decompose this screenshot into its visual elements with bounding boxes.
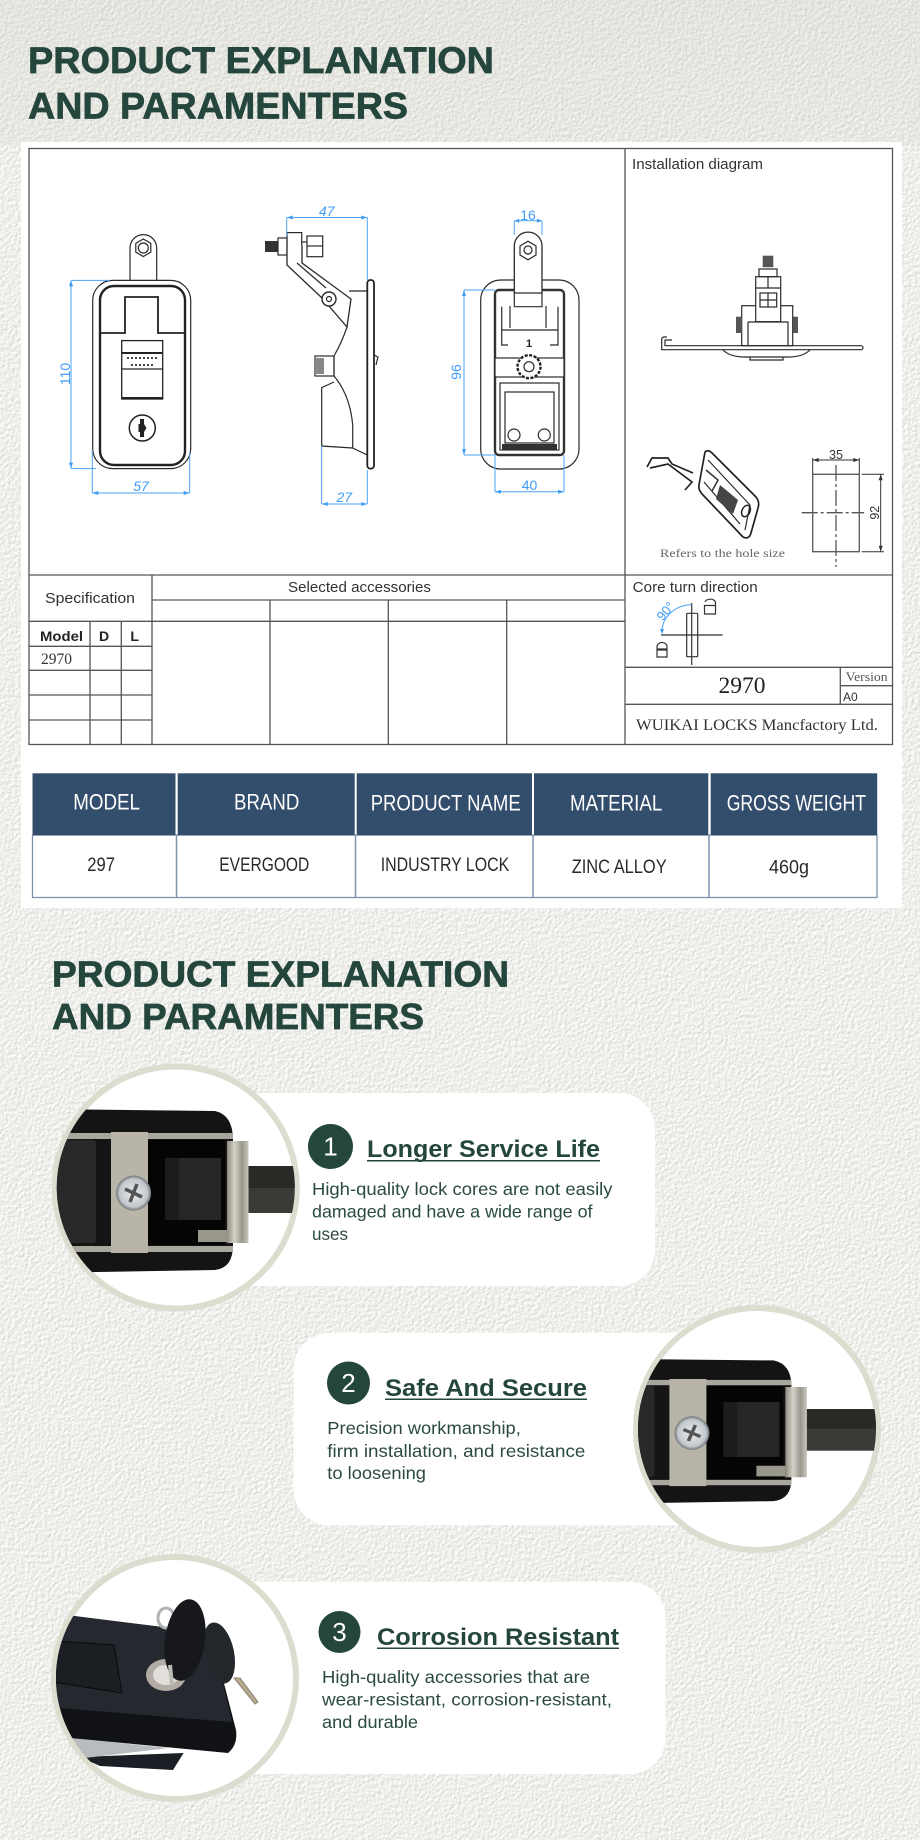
label: hole size note: Refers to the hole size <box>660 546 785 560</box>
card background <box>294 1333 774 1525</box>
specification table text <box>40 628 139 668</box>
table values <box>87 855 809 879</box>
card text 1: damaged and have a wide range of <box>312 1202 593 1222</box>
label: specification: Specification <box>45 591 135 607</box>
label: model number block: Version <box>846 670 889 684</box>
heading: second section <box>52 954 509 1037</box>
table header labels: MATERIAL <box>570 791 662 816</box>
table header cells <box>32 773 877 835</box>
drawing: rear view with dimensions: 16 <box>520 207 536 223</box>
specification table text: L <box>130 628 139 644</box>
drawing: rear view with dimensions: 40 <box>522 477 537 493</box>
feature card 1 <box>40 1066 655 1308</box>
label: model number block <box>718 670 889 704</box>
drawing: side view with dimensions <box>265 203 378 506</box>
number badge 2: 2 <box>341 1368 356 1398</box>
drawing: rear view with dimensions: 1 <box>526 338 532 350</box>
technical drawing frame <box>29 148 892 744</box>
card background <box>170 1582 666 1774</box>
drawing: rear view with dimensions: 96 <box>448 364 464 380</box>
drawing: front view with dimensions: 57 <box>133 478 150 494</box>
label: model number block: 2970 <box>718 673 766 699</box>
diagram: core turn direction <box>653 599 723 665</box>
card text 1: uses <box>312 1224 348 1244</box>
specification table text: D <box>99 628 109 644</box>
table header labels <box>73 789 866 816</box>
table values: INDUSTRY LOCK <box>381 855 510 876</box>
specification table text: 2970 <box>41 651 72 668</box>
label: model number block: A0 <box>843 690 858 704</box>
number badge 3: 3 <box>332 1617 347 1647</box>
card background <box>170 1093 655 1286</box>
title: top heading: PRODUCT EXPLANATION <box>28 40 494 81</box>
heading: second section: PRODUCT EXPLANATION <box>52 954 509 995</box>
card text 1: High-quality lock cores are not easily <box>312 1179 613 1199</box>
panel: technical drawing and specs <box>21 142 902 908</box>
product photo: lock with key <box>40 1557 296 1799</box>
table: product parameters <box>32 773 877 898</box>
diagram: core turn direction: 90° <box>653 599 678 623</box>
table values: 460g <box>769 858 809 879</box>
feature card 3 <box>40 1557 666 1799</box>
table values: 297 <box>87 855 115 876</box>
card text 3: High-quality accessories that are <box>322 1667 590 1687</box>
number badge 1 <box>308 1124 353 1169</box>
card text 2 <box>327 1418 585 1483</box>
table header labels: BRAND <box>234 789 299 814</box>
drawing: hole size dimensions <box>802 448 884 567</box>
drawing: front view with dimensions <box>57 235 191 495</box>
number badge 2 <box>327 1362 370 1404</box>
feature card 2 <box>294 1308 896 1550</box>
drawing: side view with dimensions: 27 <box>336 489 353 505</box>
drawing: front view with dimensions: 110 <box>57 363 73 385</box>
drawing: side view with dimensions: 47 <box>319 203 336 219</box>
product photo: lock rear <box>633 1305 881 1553</box>
title: top heading <box>28 40 494 126</box>
title: top heading: AND PARAMENTERS <box>28 86 408 126</box>
table values: EVERGOOD <box>219 855 309 876</box>
card title 3: Corrosion Resistant <box>377 1624 619 1651</box>
table values: ZINC ALLOY <box>572 857 667 878</box>
drawing: hole size dimensions: 35 <box>829 448 843 462</box>
label: selected accessories: Selected accessories <box>288 580 431 596</box>
card text 1 <box>312 1179 613 1244</box>
heading: second section: AND PARAMENTERS <box>52 996 424 1037</box>
specification table text: Model <box>40 628 83 644</box>
card text 2: Precision workmanship, <box>327 1418 521 1438</box>
drawing: isometric lock view <box>647 451 759 538</box>
card title 2: Safe And Secure <box>385 1375 587 1402</box>
drawing: installed side view <box>662 256 863 360</box>
card text 2: to loosening <box>327 1463 426 1483</box>
card text 3: and durable <box>322 1712 418 1732</box>
table header labels: PRODUCT NAME <box>371 791 521 816</box>
card text 3 <box>321 1667 612 1732</box>
table header labels: MODEL <box>73 789 140 814</box>
card text 3: wear-resistant, corrosion-resistant, <box>321 1690 612 1710</box>
card text 2: firm installation, and resistance <box>327 1441 585 1461</box>
label: installation diagram: Installation diagram <box>632 157 763 173</box>
label: core turn direction: Core turn direction <box>633 580 758 596</box>
number badge 1: 1 <box>323 1132 338 1162</box>
card title 1: Longer Service Life <box>367 1136 600 1163</box>
drawing: hole size dimensions: 92 <box>868 506 882 520</box>
label: manufacturer: WUIKAI LOCKS Mancfactory Ltd. <box>636 717 878 734</box>
table header labels: GROSS WEIGHT <box>727 791 866 816</box>
number badge 3 <box>318 1611 360 1653</box>
drawing: rear view with dimensions <box>448 207 579 494</box>
product photo: lock rear <box>52 1064 300 1312</box>
